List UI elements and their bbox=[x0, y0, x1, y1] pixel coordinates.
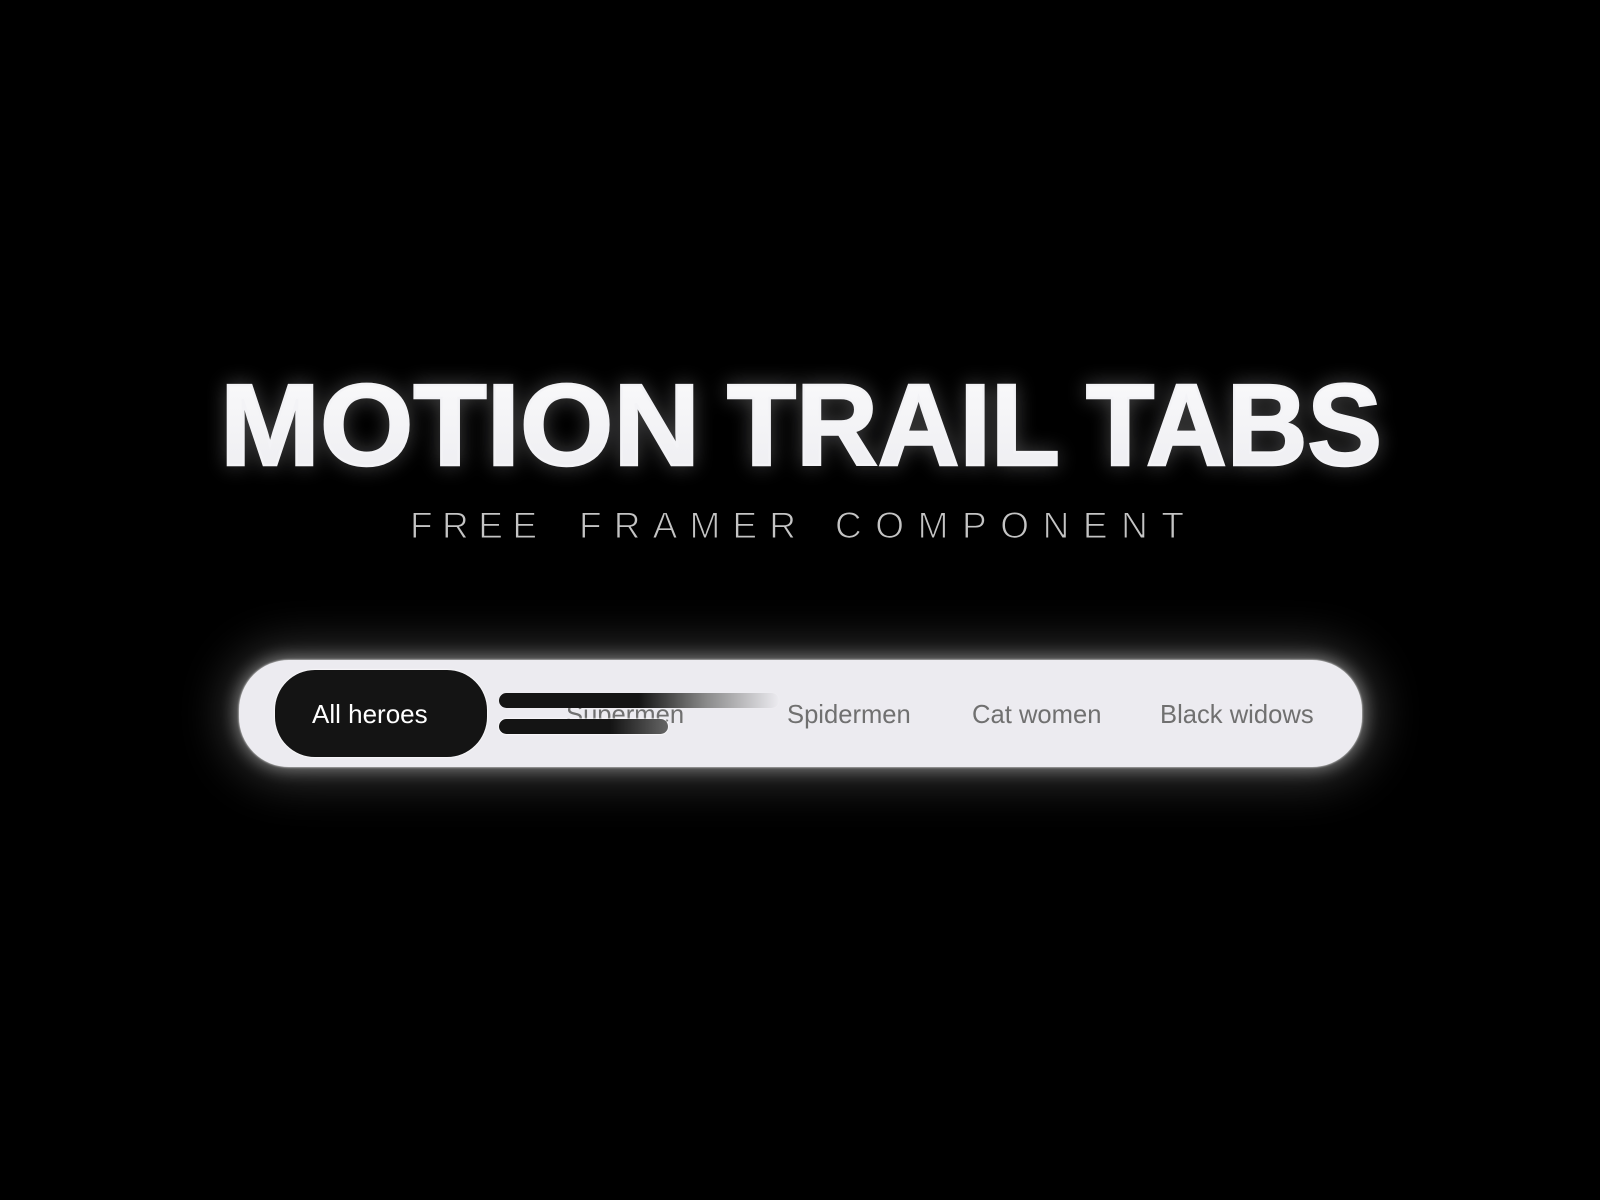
active tab: All heroes bbox=[275, 670, 487, 757]
tab: Black widows: Black widows bbox=[1160, 701, 1314, 729]
tab bar bbox=[239, 660, 1362, 767]
active tab: All heroes: All heroes bbox=[312, 699, 428, 729]
title bbox=[216, 360, 1388, 490]
subtitle: FRAMER bbox=[579, 505, 796, 546]
title: TABS bbox=[1086, 360, 1382, 490]
motion trail: upper streak bbox=[499, 693, 779, 708]
title: MOTION bbox=[220, 360, 700, 490]
tab: Cat women: Cat women bbox=[972, 701, 1101, 729]
motion trail: lower streak bbox=[499, 719, 668, 734]
subtitle: COMPONENT bbox=[835, 505, 1184, 546]
subtitle: FREE bbox=[410, 505, 537, 546]
tab: Spidermen: Spidermen bbox=[787, 701, 911, 729]
title: TRAIL bbox=[727, 360, 1060, 490]
subtitle bbox=[410, 505, 1184, 546]
tab: Supermen: Supermen bbox=[566, 701, 684, 729]
